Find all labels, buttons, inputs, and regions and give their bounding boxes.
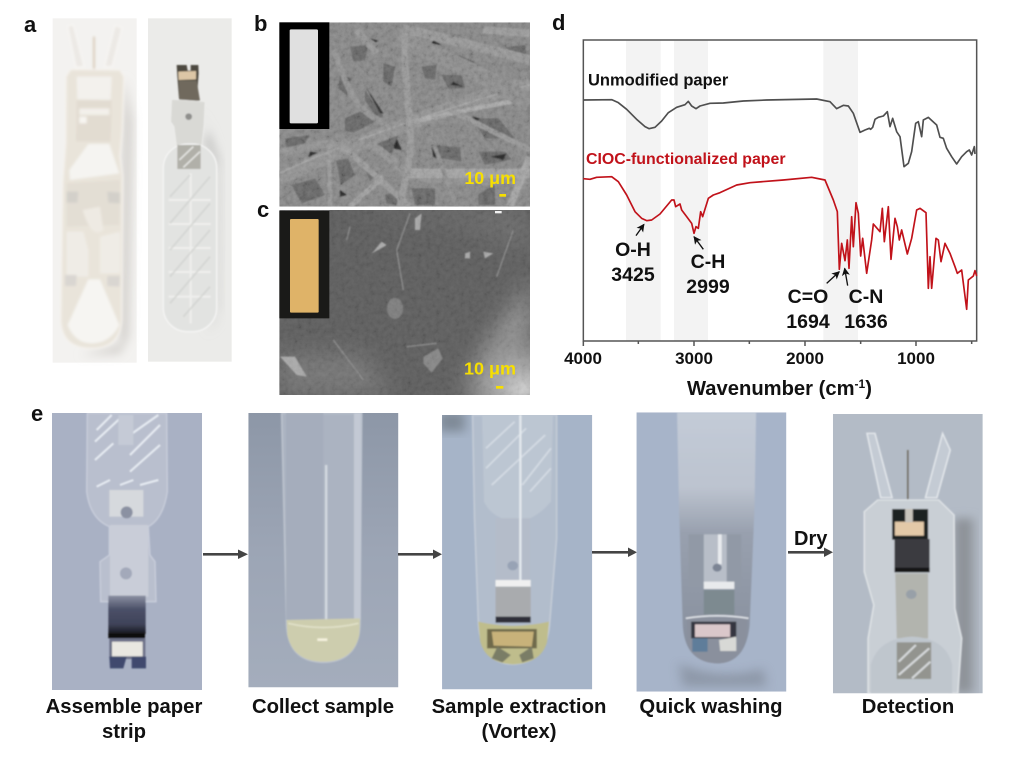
panel a: photo of holder, outer side with metal clip bbox=[148, 18, 232, 362]
step caption: quick washing: Quick washing bbox=[639, 696, 783, 718]
metal clip bbox=[177, 65, 199, 103]
peak label C-N 1636: 1636 bbox=[844, 311, 888, 333]
x axis title: Wavenumber (cm bbox=[687, 378, 855, 400]
panel e2: photo of sample collection tube bbox=[248, 413, 398, 687]
step caption: collect sample: Collect sample bbox=[252, 696, 394, 718]
x axis tick labels bbox=[564, 349, 935, 368]
scale label and bar: 10 μm bbox=[464, 168, 516, 188]
panel d: FTIR spectra chart bbox=[583, 40, 977, 346]
peak label C-N 1636: C-N bbox=[849, 286, 883, 308]
inset: white paper strip on black bbox=[279, 22, 329, 129]
panel label e: e bbox=[31, 401, 43, 426]
arrow: drying step with Dry label: Dry bbox=[794, 528, 828, 550]
plot frame and ticks bbox=[583, 40, 977, 346]
scale label and bar: 10 μm bbox=[464, 358, 516, 378]
dark gaps between fibres bbox=[285, 45, 527, 205]
peak label O-H 3425 bbox=[611, 239, 655, 286]
arrow: step 1 to step 2 bbox=[203, 550, 248, 559]
paddle bbox=[163, 144, 217, 332]
step caption: assemble paper strip: Assemble paper bbox=[46, 696, 202, 718]
peak label C=O 1694: C=O bbox=[788, 286, 828, 308]
cellulose fibres bbox=[279, 25, 530, 207]
peak label O-H 3425: O-H bbox=[615, 239, 651, 261]
unmodified paper trace bbox=[583, 99, 975, 167]
x axis tick labels: 3000 bbox=[675, 349, 713, 368]
peak label C-H 2999: 2999 bbox=[686, 276, 730, 298]
CIOC-functionalized paper trace bbox=[583, 177, 977, 309]
panel e4: photo of quick washing bbox=[637, 412, 786, 692]
peak label C-N 1636 bbox=[844, 286, 888, 333]
panel label c: c bbox=[257, 197, 269, 222]
peak label C-H 2999: C-H bbox=[691, 251, 725, 273]
peak label O-H 3425: 3425 bbox=[611, 264, 655, 286]
step caption: detection: Detection bbox=[862, 696, 954, 718]
inset: orange paper strip on black bbox=[279, 211, 329, 318]
peak label C=O 1694: 1694 bbox=[786, 311, 830, 333]
legend label: unmodified paper: Unmodified paper bbox=[588, 72, 729, 90]
arrow: step 2 to step 3 bbox=[398, 550, 442, 559]
panel label a: a bbox=[24, 12, 37, 37]
panel a: photo of holder, inner side bbox=[53, 18, 137, 363]
x axis title: ) bbox=[865, 378, 872, 400]
prongs bbox=[68, 25, 122, 67]
scale label and bar bbox=[464, 358, 516, 389]
step caption: sample extraction: (Vortex) bbox=[481, 721, 557, 743]
panel e5: photo of device ready for detection bbox=[833, 414, 983, 693]
x axis tick labels: 2000 bbox=[786, 349, 824, 368]
panel e1: photo of assembled paper strip bbox=[52, 413, 202, 690]
panel e3: photo of sample extraction in vortex bbox=[438, 412, 592, 689]
x axis title: -1 bbox=[855, 377, 866, 391]
neck bbox=[171, 99, 205, 147]
x axis tick labels: 4000 bbox=[564, 349, 602, 368]
highlighted wavenumber bands bbox=[626, 41, 858, 341]
peak label C=O 1694 bbox=[786, 286, 830, 333]
step caption: assemble paper strip: strip bbox=[102, 721, 146, 743]
step caption: sample extraction bbox=[432, 696, 606, 743]
step caption: assemble paper strip bbox=[46, 696, 202, 743]
legend label: CIOC-functionalized paper: CIOC-functionalized paper bbox=[586, 151, 786, 168]
x axis tick labels: 1000 bbox=[897, 349, 935, 368]
panel label b: b bbox=[254, 11, 267, 36]
panel c: SEM image of CIOC-functionalized paper bbox=[279, 210, 530, 395]
scale label and bar bbox=[464, 168, 516, 197]
holder body bbox=[61, 69, 124, 348]
annotation arrows bbox=[636, 224, 848, 286]
arrow: drying step with Dry label bbox=[788, 528, 833, 557]
step caption: sample extraction: Sample extraction bbox=[432, 696, 606, 718]
panel b: SEM image of unmodified paper bbox=[279, 22, 530, 207]
peak label C-H 2999 bbox=[686, 251, 730, 298]
panel label d: d bbox=[552, 10, 565, 35]
arrow: step 3 to step 4 bbox=[592, 548, 637, 557]
